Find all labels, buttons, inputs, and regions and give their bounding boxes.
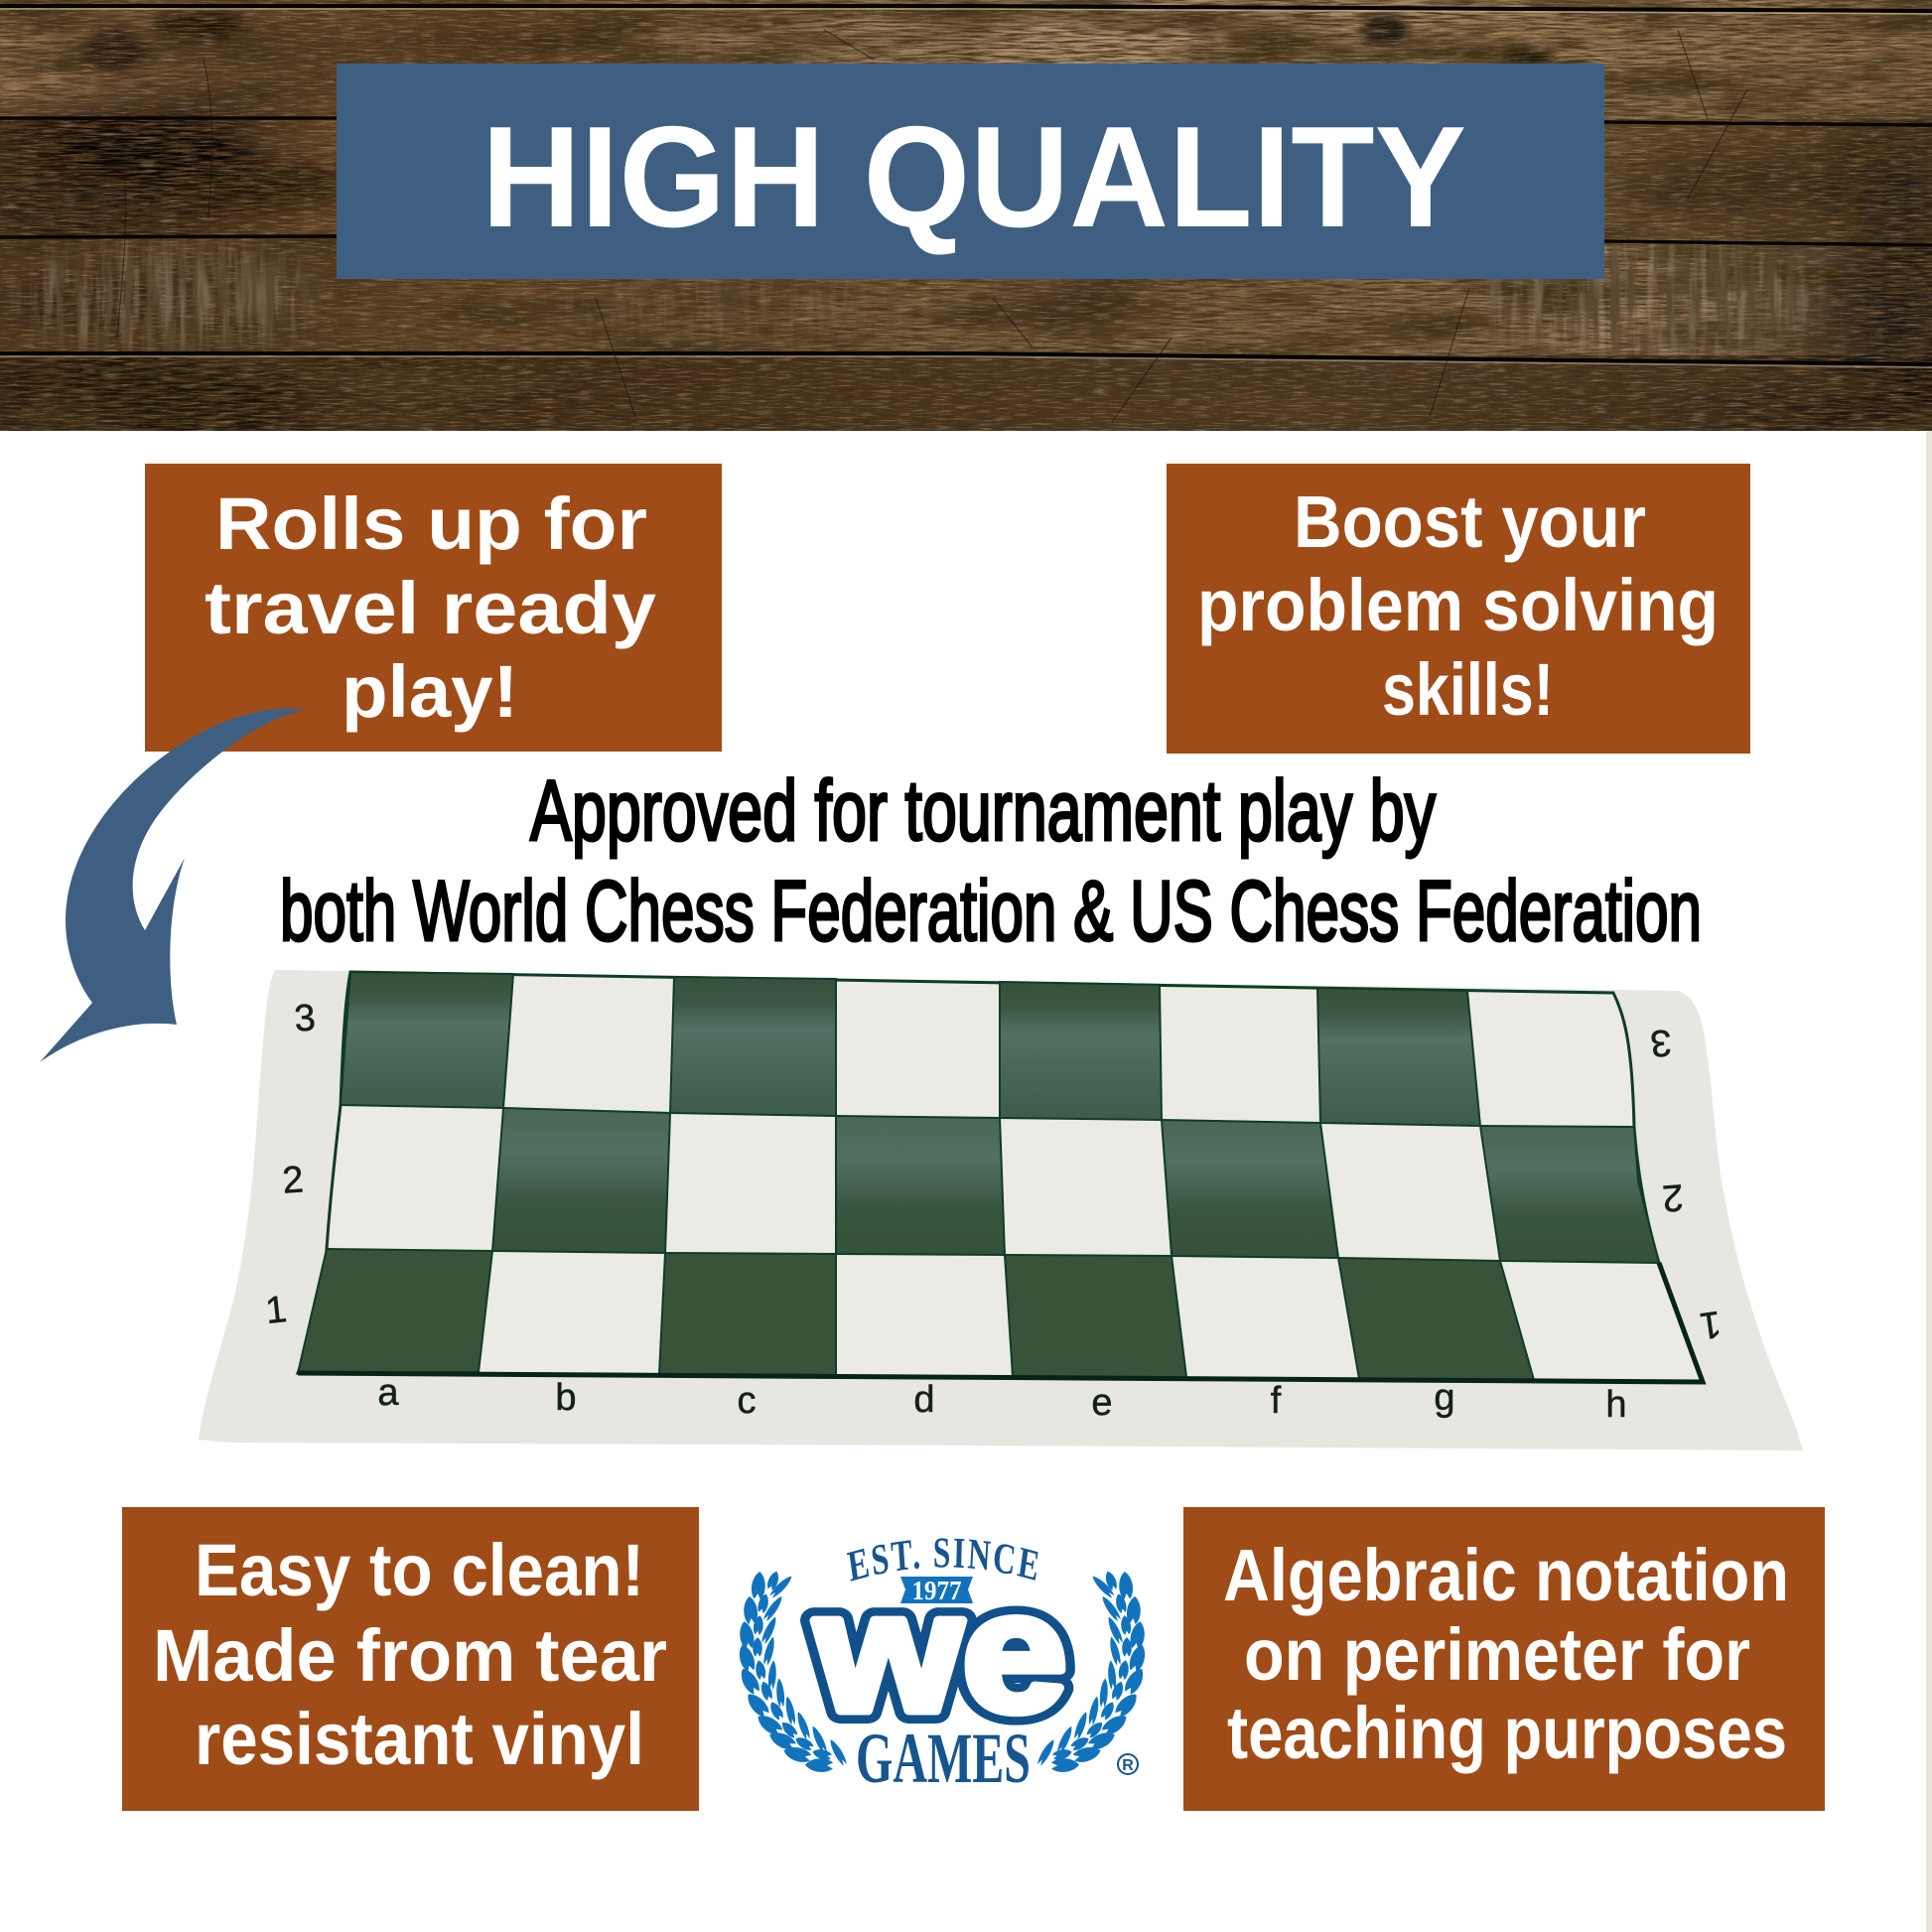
rank and file notation: 3 [1649, 1021, 1673, 1064]
tournament approval text [280, 763, 1702, 959]
rank and file notation [263, 997, 1724, 1426]
callout: easy to clean: Made from tear [153, 1614, 667, 1697]
rank 3 dark squares [341, 972, 1480, 1126]
rank and file notation: h [1605, 1384, 1627, 1426]
board squares base [298, 972, 1703, 1382]
vinyl sheet [199, 970, 1803, 1450]
rank and file notation: 2 [281, 1159, 305, 1202]
rank 1 dark squares [298, 1249, 1534, 1380]
board bottom and right border [298, 1263, 1703, 1382]
callout: algebraic notation: Algebraic notation [1223, 1534, 1789, 1616]
callout: easy to clean [122, 1507, 699, 1811]
logo 1977 ribbon: 1977 [911, 1576, 961, 1605]
logo: WE Games [739, 1538, 1146, 1798]
callout: rolls up for travel: travel ready [205, 567, 656, 649]
callout: boost problem solving: Boost your [1294, 481, 1646, 563]
callout: easy to clean: resistant vinyl [195, 1698, 644, 1780]
rank and file notation: a [377, 1372, 399, 1414]
beige right edge strip [1926, 431, 1932, 1932]
logo wreath left [736, 1570, 849, 1772]
rank and file notation: 3 [293, 997, 317, 1040]
rank and file notation: 1 [1697, 1303, 1724, 1346]
rank and file notation: 2 [1661, 1175, 1685, 1219]
callout: rolls up for travel: Rolls up for [215, 483, 647, 565]
logo we lettering: we [814, 1557, 1067, 1747]
rank 2 dark squares [492, 1108, 1659, 1263]
rank and file notation: e [1091, 1382, 1113, 1424]
callout: rolls up for travel: play! [342, 650, 518, 733]
rank and file notation: 1 [263, 1289, 289, 1332]
registered mark [1118, 1754, 1138, 1774]
logo games lettering: GAMES [856, 1719, 1031, 1798]
title text: HIGH QUALITY [482, 96, 1466, 257]
rank and file notation: g [1434, 1377, 1455, 1419]
rank and file notation: b [555, 1377, 577, 1419]
arrow: curved blue arrow [40, 709, 305, 1062]
wood plank header background [0, 0, 1932, 431]
callout: boost problem solving: skills! [1382, 648, 1554, 731]
callout: rolls up for travel [145, 464, 722, 752]
logo est since arc text: EST. SINCE [846, 1538, 1038, 1582]
rank and file notation: d [913, 1379, 935, 1421]
chess board product [199, 970, 1803, 1450]
callout: boost problem solving: problem solving [1197, 564, 1719, 646]
logo wreath right [1035, 1570, 1149, 1772]
callout: boost problem solving [1167, 464, 1750, 754]
callout: easy to clean: Easy to clean! [195, 1529, 644, 1611]
callout: algebraic notation: teaching purposes [1227, 1692, 1787, 1774]
logo we lettering: we [814, 1557, 1067, 1747]
rank and file notation: f [1271, 1380, 1282, 1422]
callout: algebraic notation: on perimeter for [1244, 1613, 1750, 1696]
title banner [337, 64, 1604, 279]
registered mark: R [1122, 1757, 1134, 1774]
callout: algebraic notation [1183, 1507, 1825, 1811]
tournament approval text: Approved for tournament play by [530, 763, 1436, 859]
rank and file notation: c [737, 1380, 757, 1422]
